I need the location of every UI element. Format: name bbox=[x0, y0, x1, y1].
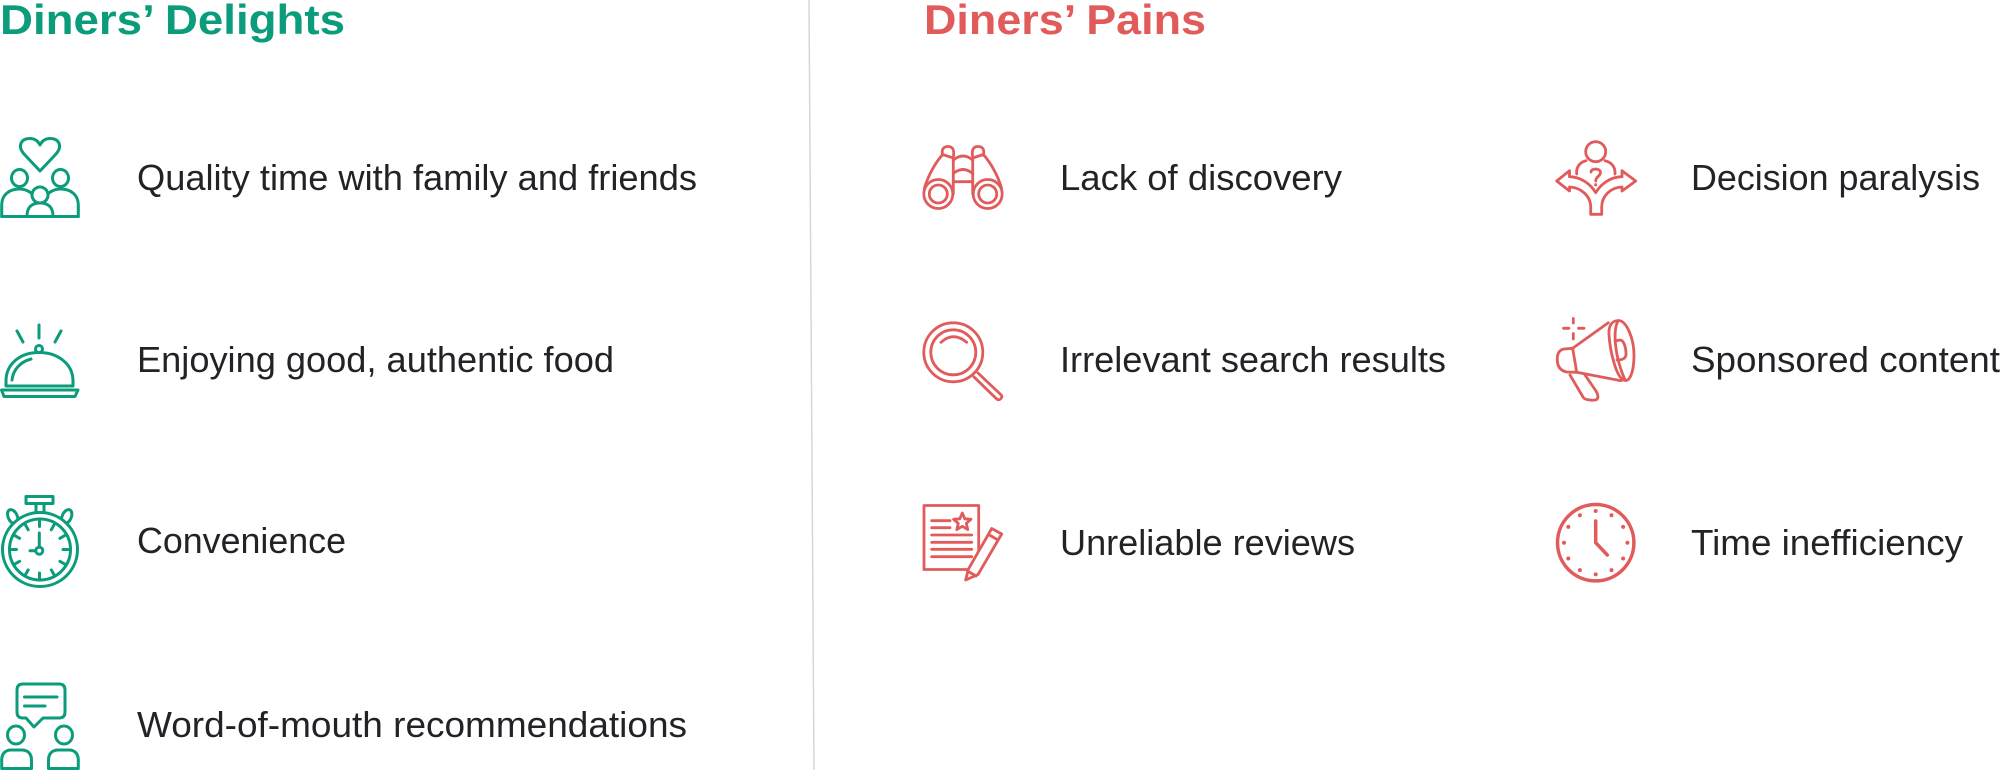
label: Quality time with family and friends bbox=[137, 157, 697, 198]
icon: megaphone bbox=[1557, 318, 1634, 400]
label: Word-of-mouth recommendations bbox=[137, 704, 687, 745]
label: Time inefficiency bbox=[1691, 522, 1963, 563]
item: good food bbox=[2, 325, 614, 396]
panel: diners' delights bbox=[0, 0, 697, 768]
label: Enjoying good, authentic food bbox=[137, 339, 614, 380]
item: word of mouth bbox=[2, 684, 687, 768]
icon: clock bbox=[1558, 504, 1634, 581]
icon: document and pencil bbox=[924, 506, 1002, 580]
item: unreliable reviews bbox=[924, 506, 1355, 580]
item: sponsored content bbox=[1557, 318, 2000, 400]
item: time inefficiency bbox=[1558, 504, 1963, 581]
panel: diners' pains bbox=[924, 0, 2000, 581]
icon: people with speech bubble bbox=[2, 684, 78, 768]
icon: stopwatch bbox=[2, 496, 78, 586]
label: Convenience bbox=[137, 520, 346, 561]
icon: magnifying glass bbox=[924, 323, 1002, 400]
item: quality time bbox=[2, 138, 697, 216]
icon: binoculars bbox=[924, 146, 1002, 208]
label: Sponsored content bbox=[1691, 339, 2000, 380]
item: lack of discovery bbox=[924, 146, 1342, 208]
icon: person at crossroads bbox=[1557, 142, 1636, 214]
label: Decision paralysis bbox=[1691, 157, 1980, 198]
label: Lack of discovery bbox=[1060, 157, 1342, 198]
icon: family with heart bbox=[2, 138, 78, 216]
item: convenience bbox=[2, 496, 346, 586]
icon: food cloche bbox=[2, 325, 78, 396]
item: irrelevant search results bbox=[924, 323, 1446, 400]
label: Unreliable reviews bbox=[1060, 522, 1355, 563]
label: Irrelevant search results bbox=[1060, 339, 1446, 380]
item: decision paralysis bbox=[1557, 142, 1980, 214]
